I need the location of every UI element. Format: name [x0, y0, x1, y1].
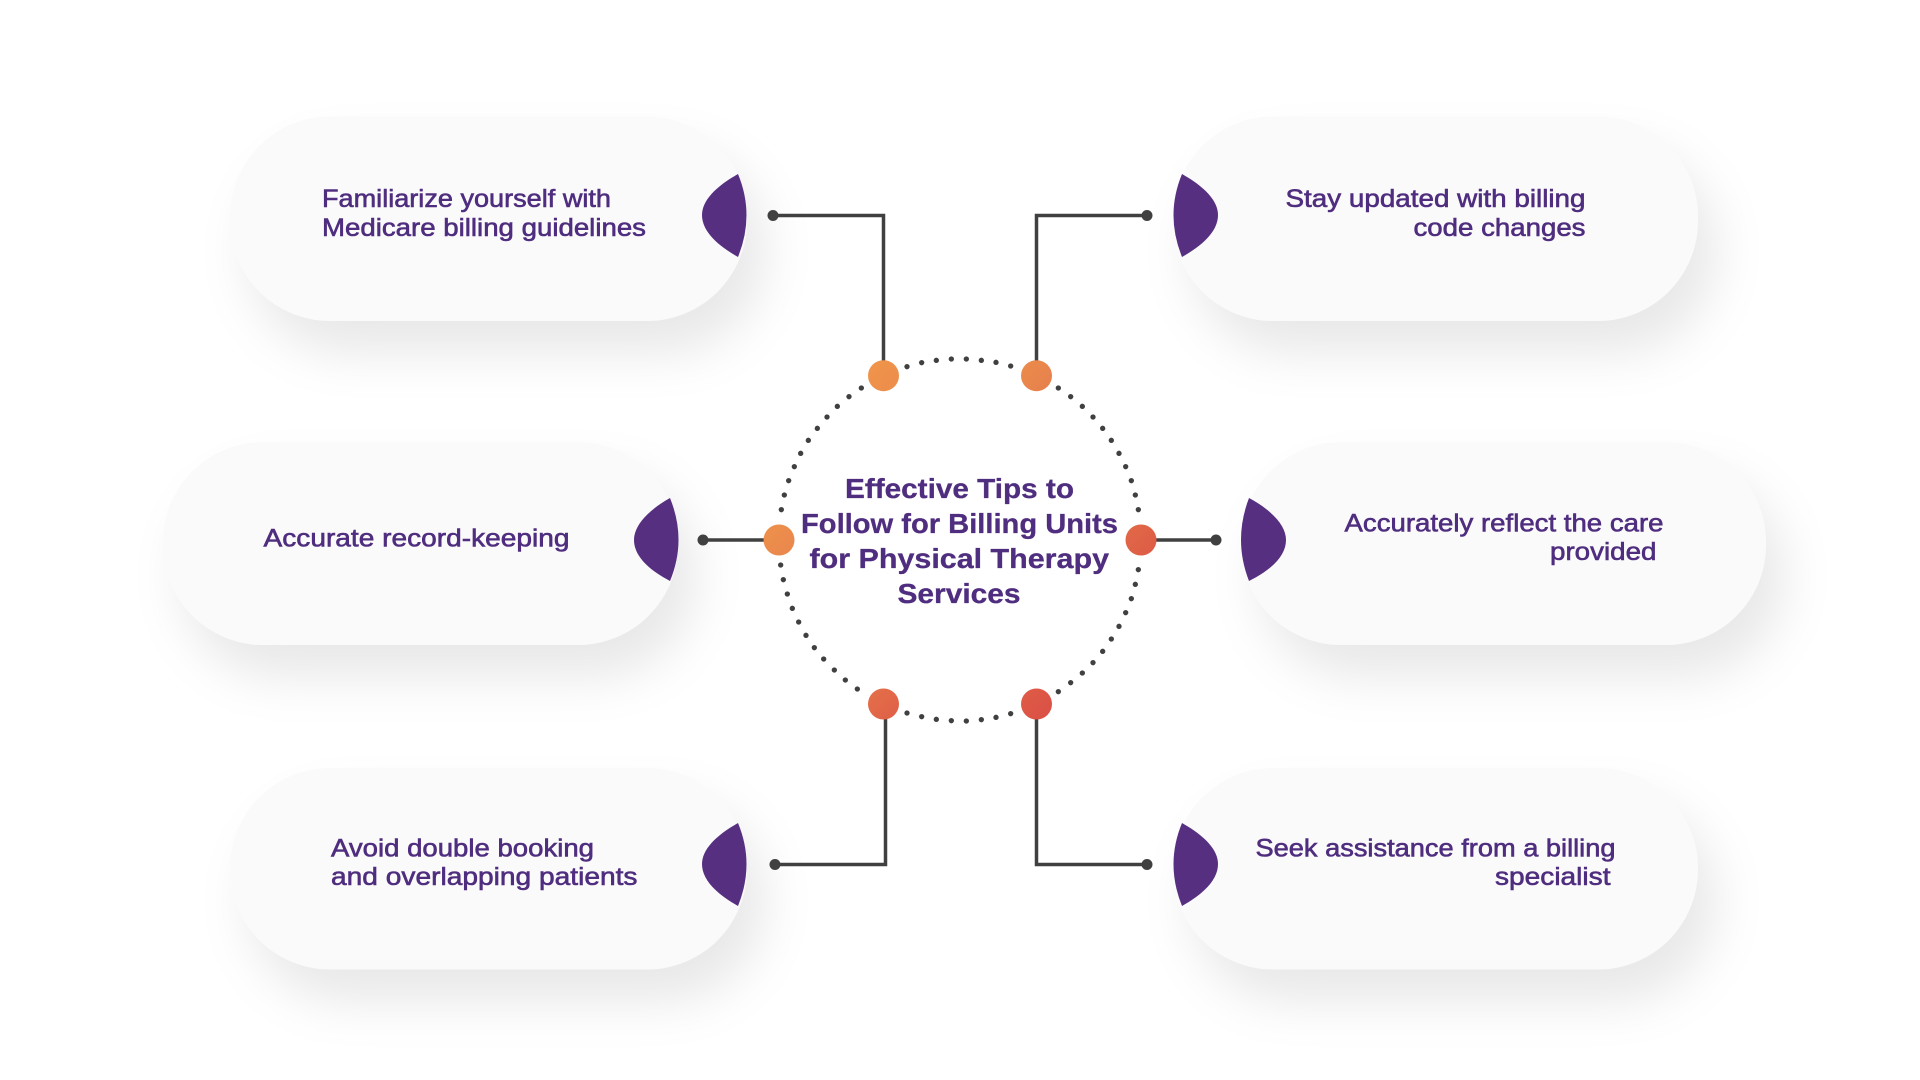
node: top right [1021, 360, 1052, 391]
connector: top left [768, 210, 884, 376]
connector: middle left [698, 534, 779, 546]
icon: lens accent top left [702, 174, 746, 257]
connector: middle right [1141, 534, 1222, 546]
title: Effective Tips to [845, 473, 1074, 504]
text: Avoid double booking and overlapping patients: and overlapping patients [331, 863, 638, 891]
panel: record-keeping tip [163, 442, 678, 645]
text: Seek assistance from a billing specialist [1256, 834, 1616, 891]
text: Avoid double booking and overlapping patients [331, 834, 638, 891]
node: middle left [764, 524, 794, 556]
text: Accurately reflect the care provided [1344, 510, 1664, 566]
icon: lens accent middle right [1241, 498, 1286, 581]
node: middle right [1126, 524, 1156, 556]
icon: lens accent top right [1174, 174, 1218, 257]
text: Familiarize yourself with Medicare billing guidelines: Familiarize yourself with [322, 185, 611, 213]
icon: lens accent middle left [634, 498, 678, 581]
title: Services [898, 578, 1020, 609]
text: Familiarize yourself with Medicare billing guidelines: Medicare billing guidelines [322, 214, 646, 242]
text: Accurate record-keeping: Accurate record-keeping [264, 524, 570, 552]
panel: billing specialist tip [1173, 768, 1698, 970]
text: Accurately reflect the care provided: Accurately reflect the care [1344, 510, 1664, 538]
panel: Medicare guidelines tip [230, 116, 747, 321]
text: Avoid double booking and overlapping patients: Avoid double booking [331, 834, 594, 862]
node: bottom right [1021, 688, 1052, 720]
connector: bottom left [770, 704, 886, 870]
node: top left [868, 360, 899, 391]
node: bottom left [868, 688, 899, 720]
connector: bottom right [1036, 704, 1152, 870]
text: Familiarize yourself with Medicare billing guidelines [322, 185, 646, 242]
panel: billing code changes tip [1173, 116, 1698, 321]
panel: double booking tip [230, 768, 747, 970]
title: Follow for Billing Units [801, 508, 1118, 539]
text: Seek assistance from a billing specialist: Seek assistance from a billing [1256, 834, 1616, 862]
dotted ring [778, 356, 1141, 724]
text: Stay updated with billing code changes: code changes [1414, 214, 1586, 242]
text: Accurately reflect the care provided: provided [1550, 538, 1656, 566]
text: Stay updated with billing code changes: Stay updated with billing [1286, 185, 1586, 213]
connector: top right [1036, 210, 1152, 376]
icon: lens accent bottom left [702, 823, 746, 906]
icon: lens accent bottom right [1174, 823, 1218, 906]
title: for Physical Therapy [810, 543, 1109, 574]
title [801, 473, 1118, 609]
text: Seek assistance from a billing specialist: specialist [1495, 863, 1611, 891]
text: Stay updated with billing code changes [1286, 185, 1586, 242]
panel: reflect the care tip [1241, 442, 1766, 645]
